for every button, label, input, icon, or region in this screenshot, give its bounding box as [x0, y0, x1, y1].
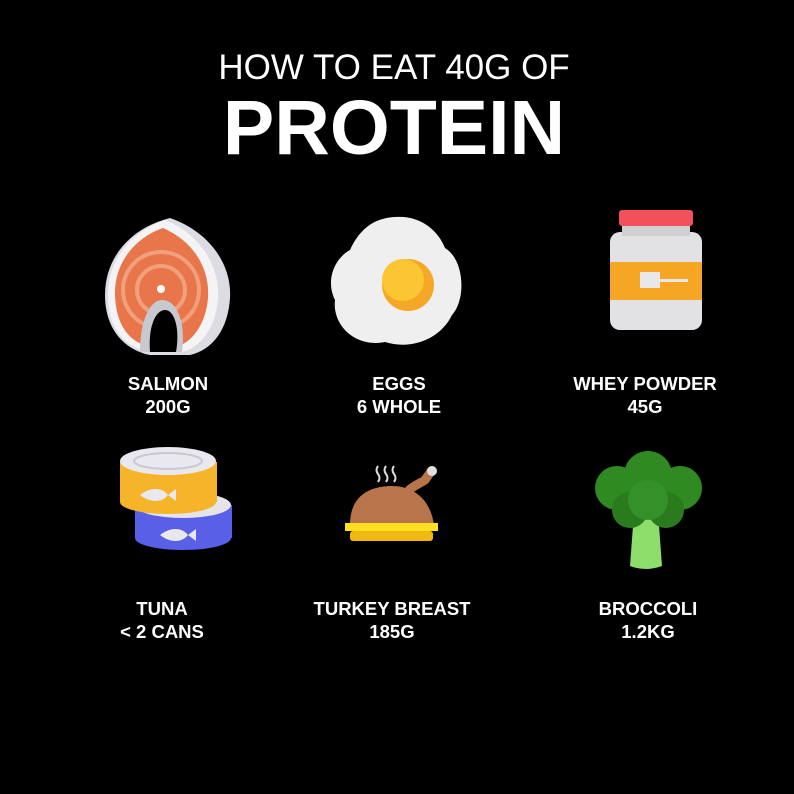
icon: egg	[331, 217, 461, 345]
label: tuna: TUNA	[136, 598, 188, 619]
label: eggs: 6 WHOLE	[357, 396, 441, 417]
label: turkey: TURKEY BREAST	[314, 598, 470, 619]
label: eggs	[357, 373, 441, 417]
icon: whey powder	[610, 210, 702, 330]
label: whey: WHEY POWDER	[573, 373, 717, 394]
icon: broccoli	[595, 451, 702, 569]
label: whey: 45G	[628, 396, 662, 417]
label: turkey	[314, 598, 470, 642]
icon: turkey	[345, 466, 438, 541]
title line 1: HOW TO EAT 40G OF	[218, 48, 570, 87]
label: turkey: 185G	[369, 621, 415, 642]
label: whey	[573, 373, 717, 417]
label: broccoli: 1.2KG	[621, 621, 675, 642]
label: broccoli	[599, 598, 697, 642]
title line 2: PROTEIN	[223, 85, 565, 171]
icon: tuna cans	[120, 447, 232, 550]
label: salmon: SALMON	[128, 373, 208, 394]
label: salmon	[128, 373, 208, 417]
icon: salmon	[105, 218, 230, 355]
label: salmon: 200G	[145, 396, 191, 417]
label: tuna: < 2 CANS	[120, 621, 204, 642]
label: tuna	[120, 598, 204, 642]
label: eggs: EGGS	[372, 373, 426, 394]
label: broccoli: BROCCOLI	[599, 598, 697, 619]
